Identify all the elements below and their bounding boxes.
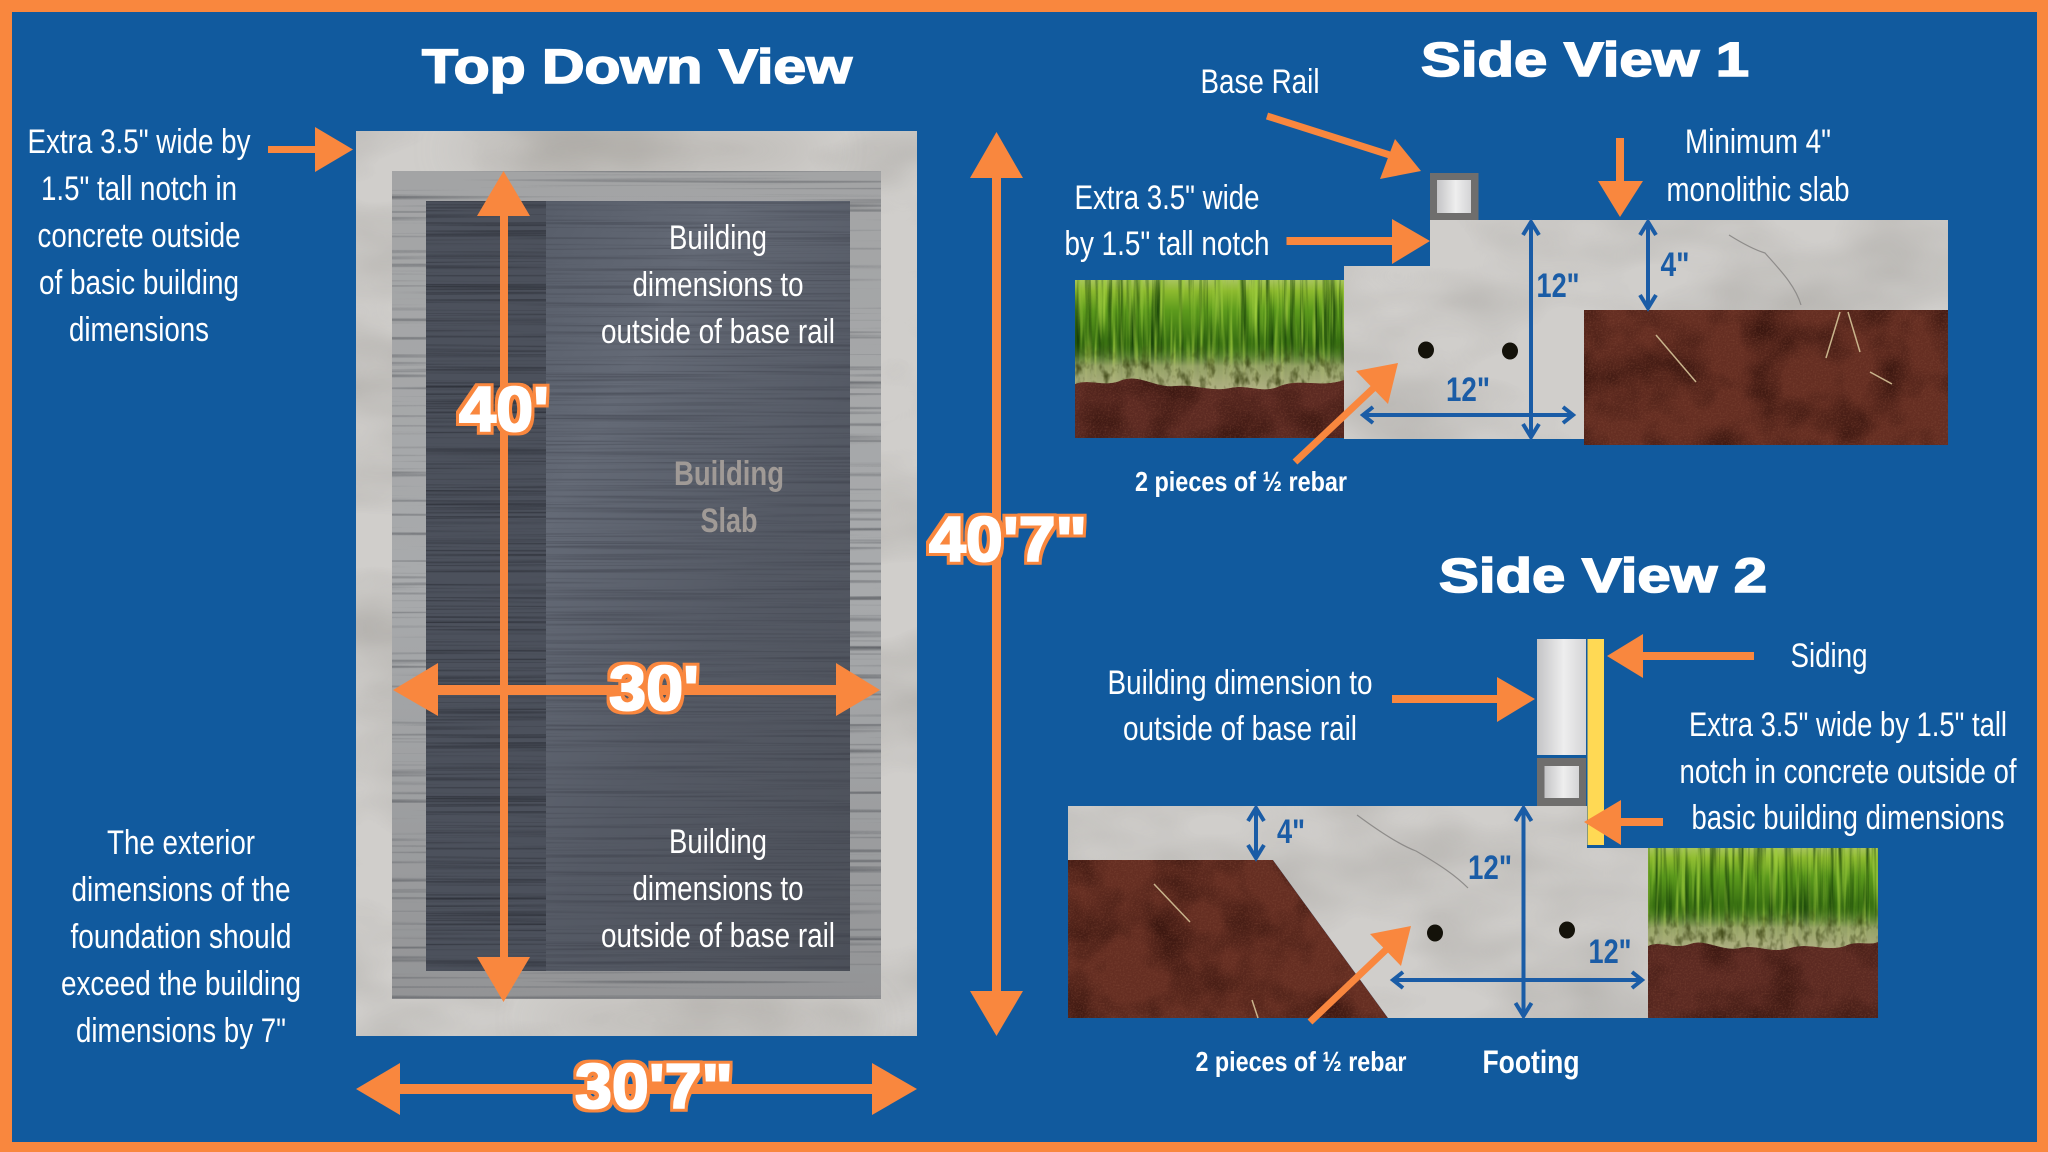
dimension: 12 inch height <box>1468 808 1532 1016</box>
text: notch note left: concrete outside <box>38 217 240 255</box>
label: building slab <box>674 455 784 540</box>
dimension: 12 inch height: 12" <box>1468 849 1512 887</box>
base rail <box>1430 173 1478 220</box>
grass and soil left <box>1075 280 1344 438</box>
label: building dimension: Building dimension to <box>1108 664 1372 702</box>
siding <box>1588 639 1604 845</box>
arrow: 40 foot 7 inch vertical <box>970 132 1023 1036</box>
label: siding: Siding <box>1790 637 1868 675</box>
soil root <box>1154 884 1258 1018</box>
label: minimum slab: monolithic slab <box>1666 171 1850 209</box>
dimension: 12 inch width: 12" <box>1588 933 1632 971</box>
label: building dimensions top: dimensions to <box>632 266 804 304</box>
label: building dimensions bottom <box>601 823 835 955</box>
arrow: 30 foot 7 inch horizontal <box>356 1063 917 1115</box>
dimension: 40 feet 7 inches: 40'7" <box>929 505 1087 575</box>
concrete crack <box>1729 235 1801 305</box>
arrow: minimum slab <box>1598 138 1643 217</box>
text: exterior dimensions note: dimensions of the <box>72 871 290 909</box>
arrow: 40 foot vertical <box>477 171 530 1002</box>
label: building dimensions bottom: dimensions to <box>632 870 804 908</box>
dimension: 12 inch width: 12" <box>1446 371 1490 409</box>
text: notch note left <box>28 123 250 349</box>
wall stud <box>1537 639 1586 755</box>
grass roots in soil <box>1656 312 1892 384</box>
label: building dimensions top <box>601 219 835 351</box>
panel: side view 2 cross section <box>1068 634 1878 1022</box>
arrow: rebar <box>1295 363 1398 462</box>
text: exterior dimensions note: dimensions by 7" <box>76 1012 286 1050</box>
label: notch side view 1: by 1.5" tall notch <box>1064 225 1270 263</box>
dimension: 12 inch width <box>1363 371 1573 423</box>
label: building dimension: outside of base rail <box>1123 710 1357 748</box>
arrow: notch note to slab <box>268 127 353 172</box>
label: rebar side view 2: 2 pieces of ½ rebar <box>1196 1046 1407 1077</box>
grass and soil right <box>1648 848 1878 1018</box>
title: side view 2: Side View 2 <box>1439 550 1767 603</box>
dimension: 30 feet: 30' <box>609 654 699 724</box>
dimension: 4 inch slab: 4" <box>1277 813 1305 851</box>
soil left <box>1068 860 1388 1018</box>
dimension: 12 inch height: 12" <box>1536 267 1580 305</box>
text: notch note left: of basic building <box>39 264 239 302</box>
label: building dimensions bottom: Building <box>669 823 767 861</box>
base rail band <box>392 171 881 999</box>
label: base rail: Base Rail <box>1200 63 1320 101</box>
label: building dimensions top: outside of base rail <box>601 313 835 351</box>
concrete footing and slab <box>1068 806 1648 1018</box>
title: top down view: Top Down View <box>422 41 853 94</box>
label: minimum slab <box>1666 123 1850 209</box>
arrow: notch <box>1584 800 1663 845</box>
label: notch side view 2 <box>1680 706 2017 837</box>
dimension: 4 inch slab <box>1640 222 1690 308</box>
rebar pieces <box>1418 342 1518 360</box>
label: building dimension <box>1108 664 1372 748</box>
arrow: rebar <box>1310 926 1411 1022</box>
text: exterior dimensions note: exceed the building <box>61 965 301 1003</box>
text: exterior dimensions note: The exterior <box>107 824 255 862</box>
base rail <box>1537 758 1586 806</box>
concrete crack <box>1357 815 1468 888</box>
concrete shading <box>476 131 827 1036</box>
arrow: notch <box>1286 219 1430 264</box>
label: rebar side view 1: 2 pieces of ½ rebar <box>1135 466 1347 497</box>
text: notch note left: dimensions <box>69 311 209 349</box>
foundation concrete outer edge <box>356 131 917 1036</box>
label: building dimensions top: Building <box>669 219 767 257</box>
label: notch side view 1 <box>1064 179 1270 263</box>
panel: side view 1 cross section <box>1075 116 1948 462</box>
arrow: base rail <box>1267 116 1421 179</box>
dimension: 40 feet: 40' <box>459 375 549 445</box>
dimension: 30 feet 7 inches: 30'7" <box>575 1052 733 1122</box>
text: exterior dimensions note <box>61 824 301 1050</box>
label: building slab: Slab <box>700 502 758 540</box>
label: building dimensions bottom: outside of base rail <box>601 917 835 955</box>
arrow: siding <box>1607 634 1754 678</box>
rebar pieces <box>1427 922 1575 942</box>
label: building slab: Building <box>674 455 784 493</box>
dimension: 4 inch slab: 4" <box>1660 246 1690 284</box>
dimension: 12 inch height <box>1523 222 1580 437</box>
label: notch side view 1: Extra 3.5" wide <box>1074 179 1260 217</box>
label: footing: Footing <box>1482 1044 1580 1080</box>
title: side view 1: Side View 1 <box>1421 34 1749 87</box>
text: notch note left: 1.5" tall notch in <box>41 170 237 208</box>
label: minimum slab: Minimum 4" <box>1685 123 1831 161</box>
dimension: 4 inch slab <box>1248 808 1305 858</box>
text: notch note left: Extra 3.5" wide by <box>28 123 250 161</box>
dimension: 12 inch width <box>1393 933 1642 988</box>
arrow: 30 foot horizontal <box>393 663 880 716</box>
arrow: building dimension <box>1392 677 1535 722</box>
soil right <box>1584 310 1948 445</box>
text: exterior dimensions note: foundation should <box>70 918 292 956</box>
darker streaked slab zone <box>426 201 546 971</box>
building slab interior <box>426 201 850 971</box>
concrete foundation <box>1344 220 1948 439</box>
panel: top down slab plan <box>356 131 917 1036</box>
